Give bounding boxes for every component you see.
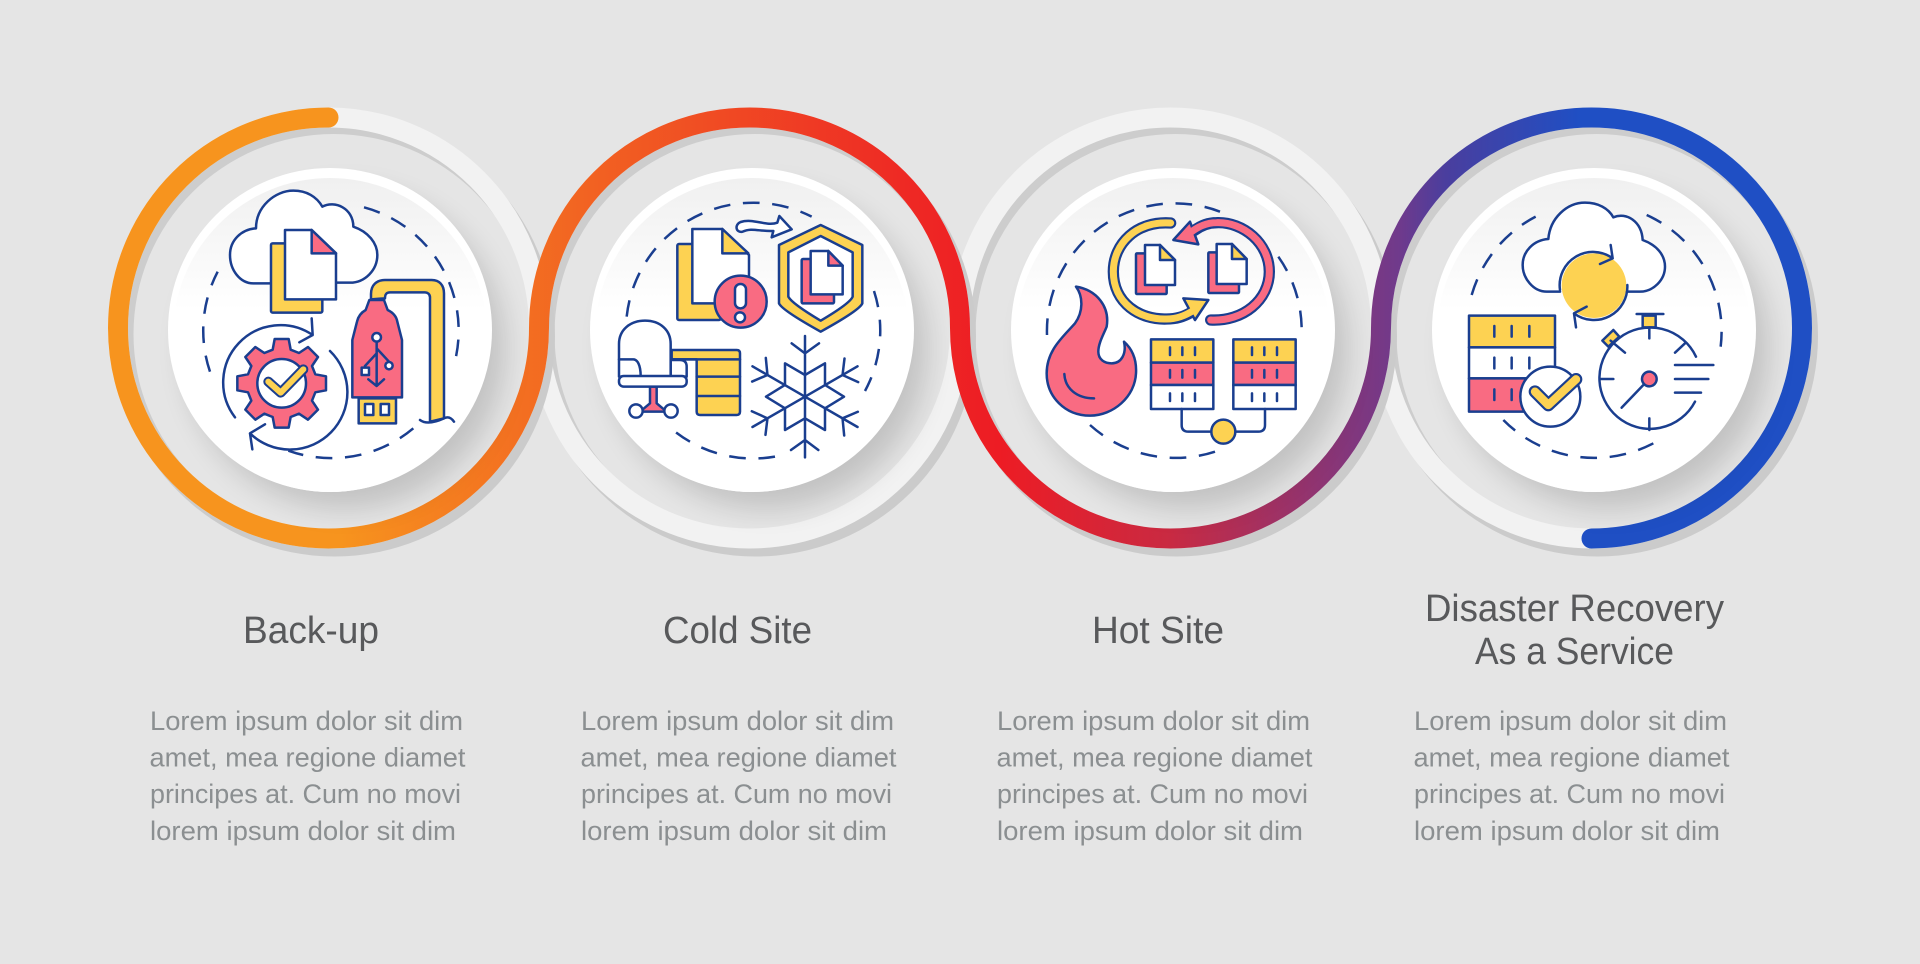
usb cable [371,280,444,422]
ring: step 3 [956,116,1397,556]
gear with check [237,339,326,428]
text block: disaster recovery as a service: Lorem ipsum dolor sit dim [1414,706,1727,736]
server stack [1469,316,1555,412]
ring: step 1 [114,116,555,556]
text block: back-up: amet, mea regione diamet [150,742,466,772]
yellow loop arrow [1113,223,1208,320]
icon: back-up [203,191,459,458]
dashed orbit [203,207,459,458]
text block: cold site: amet, mea regione diamet [580,742,897,772]
documents [271,230,336,313]
documents [1136,244,1247,294]
text block: cold site: lorem ipsum dolor sit dim [581,816,887,846]
text block: disaster recovery as a service: lorem ipsum dolor sit dim [1414,816,1720,846]
text block: back-up: Lorem ipsum dolor sit dim [150,706,463,736]
text block: cold site: Lorem ipsum dolor sit dim [581,706,894,736]
text block: hot site: lorem ipsum dolor sit dim [997,816,1303,846]
icon: hot site [1047,203,1302,458]
check badge [1520,367,1580,427]
arrow [737,216,792,237]
text block: back-up: lorem ipsum dolor sit dim [150,816,456,846]
disc: step 2 [590,168,927,509]
disc: step 1 [168,168,505,509]
ring: step 2 [535,116,976,556]
heading: Cold Site: Cold Site [663,610,812,652]
flame [1047,287,1136,416]
shield with documents [779,225,862,332]
disc: step 3 [1011,168,1348,509]
desk [672,350,740,415]
ring: step 4 [1377,116,1818,556]
disc: step 4 [1432,168,1769,509]
gradient ribbon connecting the steps [118,118,1802,538]
dashed orbit [1047,203,1302,458]
icon: cold site [619,203,880,459]
sync arrows [223,318,347,450]
heading: Disaster Recovery As a Service [1425,588,1724,673]
text block: hot site: amet, mea regione diamet [996,742,1313,772]
text block: disaster recovery as a service [1414,706,1730,846]
cloud [230,191,377,283]
text block: disaster recovery as a service: amet, mea regione diamet [1414,742,1730,772]
text block: cold site [580,706,897,846]
servers [1151,339,1296,444]
text block: hot site: principes at. Cum no movi [997,779,1308,809]
office chair [619,321,687,418]
icon: disaster recovery as a service [1469,203,1722,458]
text block: cold site: principes at. Cum no movi [581,779,892,809]
stopwatch [1599,314,1713,430]
heading: Hot Site: Hot Site [1092,610,1224,652]
snowflake [745,336,865,457]
text block: hot site: Lorem ipsum dolor sit dim [997,706,1310,736]
dashed orbit [627,203,880,459]
heading: Disaster Recovery As a Service: Disaster Recovery [1425,588,1724,630]
text block: back-up [150,706,466,846]
dashed orbit [1472,215,1722,458]
text block: disaster recovery as a service: principes at. Cum no movi [1414,779,1725,809]
usb plug [352,300,402,423]
pink loop arrow [1173,222,1269,320]
cloud with sync [1523,203,1665,327]
documents with alert [677,229,767,328]
text block: back-up: principes at. Cum no movi [150,779,461,809]
text block: hot site [996,706,1313,846]
heading: Disaster Recovery As a Service: As a Service [1475,631,1674,673]
heading: Back-up: Back-up [243,610,379,652]
